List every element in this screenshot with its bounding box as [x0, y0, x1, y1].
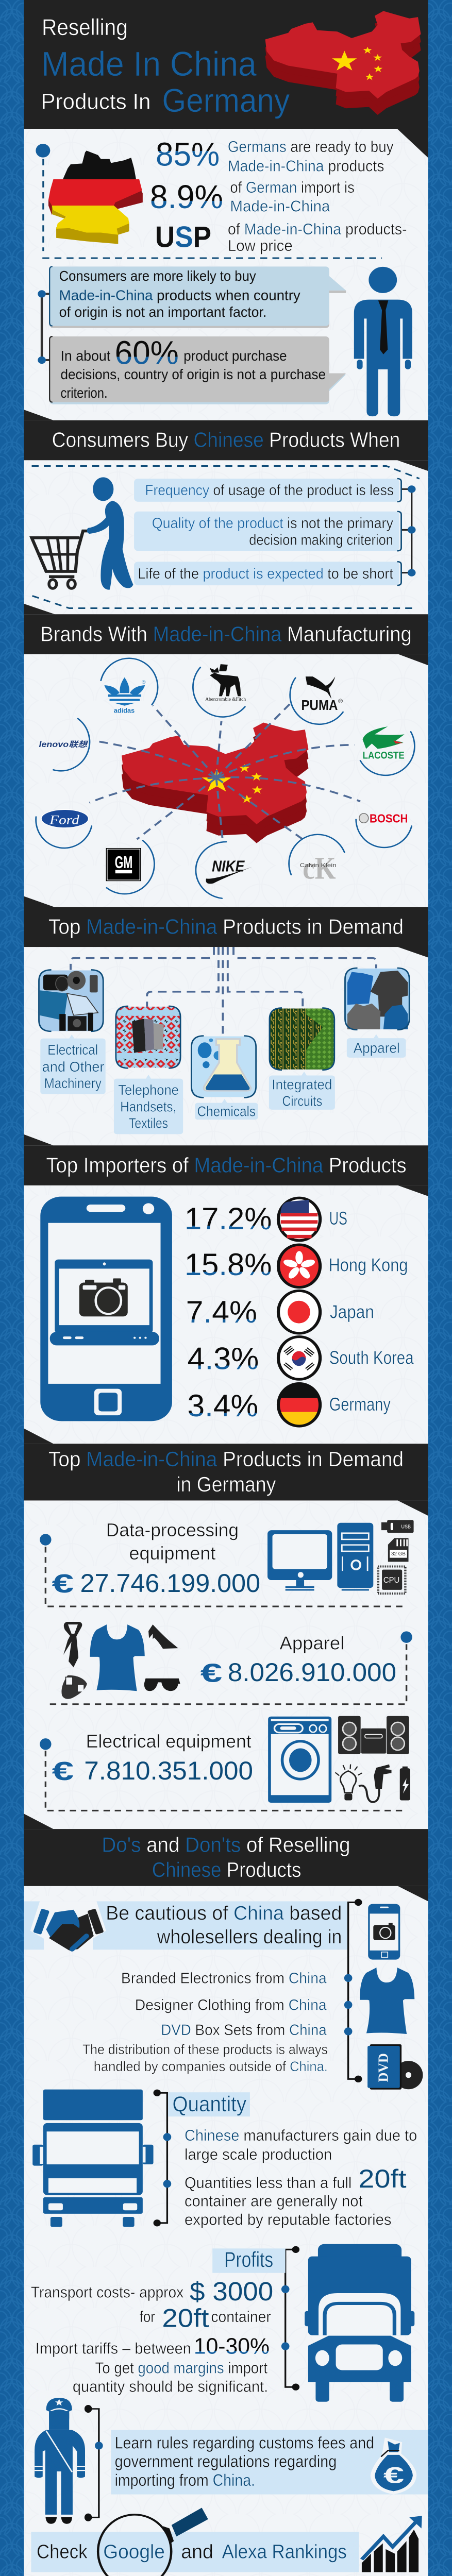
text: data processing value: €	[52, 1569, 74, 1598]
heading: Top Made-in-China Products in Demand	[48, 1448, 404, 1471]
callout: frequency: Frequency of usage of the product is less	[145, 482, 394, 499]
heading: Brands With Made-in-China Manufacturing	[40, 622, 412, 646]
text: quantity points: exported by reputable factories	[185, 2211, 392, 2228]
icon: light bulb	[335, 1765, 362, 1800]
label: circuits: Integrated	[272, 1077, 332, 1093]
stat: 8.9%: 8.9%	[150, 179, 223, 215]
callout: grey bubble: product purchase	[183, 348, 287, 364]
text: quantity points: 20ft	[358, 2165, 407, 2193]
tile: telephone handsets and textiles	[116, 1006, 180, 1068]
icon: USB stick	[381, 1520, 414, 1533]
icon: battery	[400, 1767, 410, 1800]
text: profits points: Transport costs- approx	[31, 2283, 183, 2301]
stat: US 17.2%: 17.2%	[185, 1202, 272, 1236]
text: apparel value	[200, 1633, 396, 1688]
logo: Puma: PUMA	[301, 697, 338, 714]
icon: euro money bag	[371, 2437, 416, 2495]
text: check rankings: and	[181, 2541, 213, 2563]
text: check rankings: Google	[103, 2541, 165, 2563]
icon: stereo	[338, 1716, 409, 1754]
text: electrical value	[52, 1731, 253, 1786]
text: profits points: $ 3000	[190, 2277, 273, 2306]
text: quantity points: Quantities less than a full	[185, 2174, 351, 2192]
callout: grey bubble	[49, 334, 346, 404]
text: check rankings: Alexa Rankings	[222, 2541, 347, 2563]
stat: US 17.2%: US	[329, 1208, 347, 1229]
icon: handshake	[30, 1901, 106, 1951]
logo: Nike: NIKE	[212, 857, 245, 875]
label: apparel: Apparel	[354, 1041, 400, 1056]
icon: Germany flag map	[48, 150, 143, 244]
logo: Bosch	[356, 812, 412, 848]
text: profits points: for	[140, 2308, 155, 2326]
logo: adidas	[101, 658, 158, 714]
stat: 8.9%: Made-in-China	[230, 197, 330, 215]
icon: memory card	[388, 1538, 409, 1562]
text: product list: handled by companies outside of China.	[94, 2059, 328, 2074]
title: Germany	[162, 82, 290, 119]
stat: Germany 3.4%: 3.4%	[188, 1389, 258, 1423]
callout: life: Life of the product is expected to be short	[138, 566, 393, 582]
callout: blue bubble	[49, 266, 346, 328]
stat: 85%: Germans are ready to buy	[228, 138, 393, 156]
tile: chemicals	[191, 1036, 256, 1097]
stat: USP: Low price	[228, 237, 293, 255]
tile: integrated circuits	[270, 1008, 334, 1070]
stat: 85%: 85%	[156, 136, 220, 173]
text: quantity points: Chinese manufacturers gain due to	[185, 2126, 417, 2144]
logo: Lacoste: LACOSTE	[363, 750, 405, 761]
text: electrical value: €	[52, 1757, 74, 1786]
text: quantity points: container are generally not	[185, 2192, 363, 2210]
panel: customs rules	[35, 2405, 428, 2524]
title: Products In	[41, 89, 151, 114]
callout: quality	[134, 512, 401, 551]
callout: grey bubble: decisions, country of origin is not a purchase	[60, 367, 326, 383]
icon: plug	[359, 1765, 392, 1802]
icon: washing machine	[268, 1717, 331, 1803]
heading	[48, 1448, 404, 1497]
icon: growth chart	[362, 2516, 422, 2572]
heading: Chinese Products	[152, 1858, 301, 1882]
text: profits points: container	[211, 2308, 271, 2326]
text: quantity points	[185, 2126, 417, 2228]
tile: apparel	[345, 968, 409, 1030]
label: circuits	[269, 1072, 335, 1110]
stat: South Korea 4.3%: 4.3%	[188, 1342, 259, 1376]
heading: Top Importers of Made-in-China Products	[46, 1154, 407, 1177]
title: Made In China	[41, 45, 257, 83]
icon: blue shirt	[90, 1624, 145, 1691]
stat: Hong Kong 15.8%: 15.8%	[185, 1248, 272, 1282]
callout: life	[134, 562, 401, 585]
label: chemicals: Chemicals	[197, 1104, 256, 1120]
label: electrical	[40, 1035, 106, 1094]
icon: smartphone with laptop and camera	[40, 1197, 172, 1421]
stat: 8.9%: of German import is	[230, 178, 355, 196]
text: customs rules: importing from China.	[115, 2471, 255, 2489]
icon: shopper with cart	[32, 477, 133, 590]
callout: grey bubble: criterion.	[60, 385, 108, 401]
icon: truck large	[305, 2244, 414, 2402]
stat: Hong Kong 15.8%	[185, 1243, 408, 1289]
text: cautious: wholesellers dealing in	[157, 1926, 342, 1948]
label: electrical: Electrical	[47, 1042, 98, 1058]
stat: Germany 3.4%	[188, 1382, 391, 1428]
tile: electrical machinery	[39, 970, 103, 1031]
callout: frequency	[134, 479, 401, 502]
logo: Ford: Ford	[49, 812, 79, 827]
stat: USP	[155, 220, 407, 255]
logo: Bosch: BOSCH	[370, 812, 408, 825]
logo: adidas: ®	[142, 680, 146, 685]
logo: Lenovo	[39, 719, 90, 771]
icon: sunglasses	[144, 1679, 180, 1691]
panel: data processing equipment	[40, 1519, 414, 1606]
text: profits points: 10-30%	[194, 2333, 270, 2359]
panel: top products in demand	[24, 896, 428, 1196]
panel: German stats	[36, 136, 407, 258]
title	[41, 14, 290, 119]
logo: Puma: ®	[338, 698, 343, 705]
icon: DVD box: DVD	[375, 2053, 391, 2082]
label: circuits: Circuits	[282, 1094, 322, 1109]
icon: China map with links	[89, 704, 360, 843]
callout: grey bubble: In about	[60, 348, 110, 364]
stat: USP: USP	[155, 221, 211, 253]
icon: pin	[40, 1534, 52, 1546]
text: customs rules: government regulations regarding	[115, 2452, 337, 2471]
text: profits points: quantity should be significant.	[73, 2378, 268, 2395]
text: electrical value: Electrical equipment	[86, 1731, 252, 1752]
text: product list: Designer Clothing from China	[135, 1996, 327, 2013]
text: customs rules	[111, 2430, 428, 2495]
label: telephone: Textiles	[129, 1116, 168, 1131]
text: profits points	[31, 2277, 273, 2395]
icon: desktop computer	[267, 1523, 373, 1590]
heading	[102, 1833, 350, 1882]
panel: header	[24, 0, 428, 158]
panel: google and alexa rankings	[31, 2507, 422, 2576]
callout: blue bubble: Made-in-China products when country	[59, 288, 300, 303]
icon: euro money bag: €	[383, 2462, 404, 2488]
stat: Japan 7.4%: Japan	[330, 1301, 374, 1322]
icon: tie	[63, 1622, 82, 1667]
icon: magnifying glass	[98, 2507, 208, 2576]
icon: customs cap	[46, 2398, 72, 2430]
panel: top importers	[24, 1197, 428, 1516]
heading: Top Made-in-China Products in Demand	[48, 915, 404, 939]
icon: USB stick: USB	[401, 1524, 411, 1530]
heading: profits: Profits	[224, 2248, 273, 2272]
logo: Calvin Klein: cK	[303, 851, 336, 886]
logo: adidas: adidas	[114, 706, 135, 714]
panel: profits	[31, 2244, 414, 2402]
text: quantity points: large scale production	[185, 2145, 332, 2163]
stat: South Korea 4.3%	[188, 1335, 414, 1381]
callout: grey bubble: 60%	[115, 334, 179, 371]
label: electrical: and Other	[42, 1059, 105, 1075]
callout: quality: Quality of the product is not the primary	[152, 515, 393, 532]
logo: GM	[106, 840, 154, 894]
panel: be cautious	[24, 1899, 423, 2090]
icon: DVD box	[367, 2044, 423, 2090]
icon: wristwatch	[61, 1675, 87, 1699]
panel: electrical equipment	[24, 1716, 428, 1901]
label: telephone	[114, 1075, 183, 1134]
stat: 85%	[156, 136, 393, 175]
heading: in Germany	[176, 1473, 276, 1497]
icon: customs officer	[35, 2411, 85, 2524]
heading: Do's and Don'ts of Reselling	[102, 1833, 350, 1857]
stat: 85%: Made-in-China products	[228, 157, 384, 175]
stat: Hong Kong 15.8%: Hong Kong	[329, 1255, 408, 1275]
logo: Abercrombie and Fitch: Abercrombie &Fitch	[205, 697, 246, 702]
text: product list: The distribution of these products is always	[82, 2042, 328, 2057]
label: telephone: Handsets,	[120, 1099, 176, 1115]
text: profits points: 20ft	[162, 2304, 209, 2333]
panel: consumers buy when	[24, 410, 428, 665]
panel: consumer bubbles	[38, 266, 412, 416]
text: profits points: Import tariffs – between	[36, 2340, 191, 2357]
icon: sequin shirt	[360, 1968, 414, 2034]
text: profits points: To get good margins import	[95, 2359, 267, 2377]
logo: Nike	[196, 842, 252, 899]
text: data processing value: 27.746.199.000	[80, 1569, 260, 1598]
logo: Calvin Klein	[289, 835, 344, 886]
callout: blue bubble: Consumers are more likely to buy	[59, 268, 256, 284]
title: Reselling	[42, 14, 128, 40]
text: check rankings	[31, 2532, 359, 2572]
logo: Ford	[36, 809, 92, 848]
panel: brands	[39, 658, 414, 843]
text: apparel value: Apparel	[280, 1633, 344, 1653]
icon: small phone	[368, 1904, 400, 1960]
stat: South Korea 4.3%: South Korea	[329, 1347, 414, 1368]
icon: China map	[265, 11, 421, 115]
panel: apparel	[45, 1622, 412, 1704]
stat: Japan 7.4%: 7.4%	[186, 1295, 257, 1329]
label: chemicals	[195, 1099, 258, 1120]
text: product list: DVD Box Sets from China	[161, 2021, 327, 2039]
icon: truck front	[32, 2090, 154, 2227]
text: product list	[82, 1970, 328, 2074]
text: cautious	[106, 1903, 342, 1948]
stat: US 17.2%	[185, 1197, 347, 1242]
stat: Germany 3.4%: Germany	[329, 1394, 391, 1415]
text: product list: Branded Electronics from China	[121, 1970, 327, 1987]
text: apparel value: €	[200, 1659, 222, 1688]
logo: Abercrombie and Fitch	[193, 664, 246, 717]
stat: 8.9%	[150, 178, 355, 215]
heading: Consumers Buy Chinese Products When	[52, 429, 400, 452]
panel: quantity	[32, 2090, 417, 2228]
icon: pin	[40, 1738, 52, 1750]
stat: USP: of Made-in-China products-	[228, 220, 407, 238]
logo: Calvin Klein: Calvin Klein	[300, 862, 337, 869]
text: apparel value: 8.026.910.000	[228, 1658, 396, 1687]
icon: CPU: CPU	[383, 1576, 399, 1585]
text: data processing value: Data-processing	[106, 1519, 239, 1540]
text: electrical value: 7.810.351.000	[84, 1757, 253, 1786]
text: check rankings: Check	[37, 2541, 88, 2563]
label: telephone: Telephone	[118, 1082, 179, 1098]
text: data processing value	[52, 1519, 260, 1598]
icon: pin	[400, 1631, 412, 1643]
callout: blue bubble: of origin is not an important factor.	[59, 304, 266, 320]
icon: high heel	[148, 1624, 178, 1649]
heading: quantity: Quantity	[172, 2092, 246, 2116]
logo: Lacoste	[360, 726, 414, 775]
icon: memory card: 32 GB	[391, 1551, 406, 1557]
label: electrical: Machinery	[44, 1076, 102, 1092]
icon: CPU	[378, 1567, 405, 1594]
label: apparel	[347, 1034, 406, 1058]
icon: businessman	[354, 267, 412, 416]
callout: quality: decision making criterion	[249, 532, 393, 548]
logo: Puma	[290, 676, 343, 724]
stat: Japan 7.4%	[186, 1290, 374, 1335]
text: cautious: Be cautious of China based	[106, 1903, 342, 1924]
text: data processing value: equipment	[129, 1543, 216, 1564]
logo: GM: GM	[115, 853, 132, 872]
icon: pin	[36, 144, 50, 158]
logo: Lenovo: lenovo联想	[39, 740, 88, 749]
